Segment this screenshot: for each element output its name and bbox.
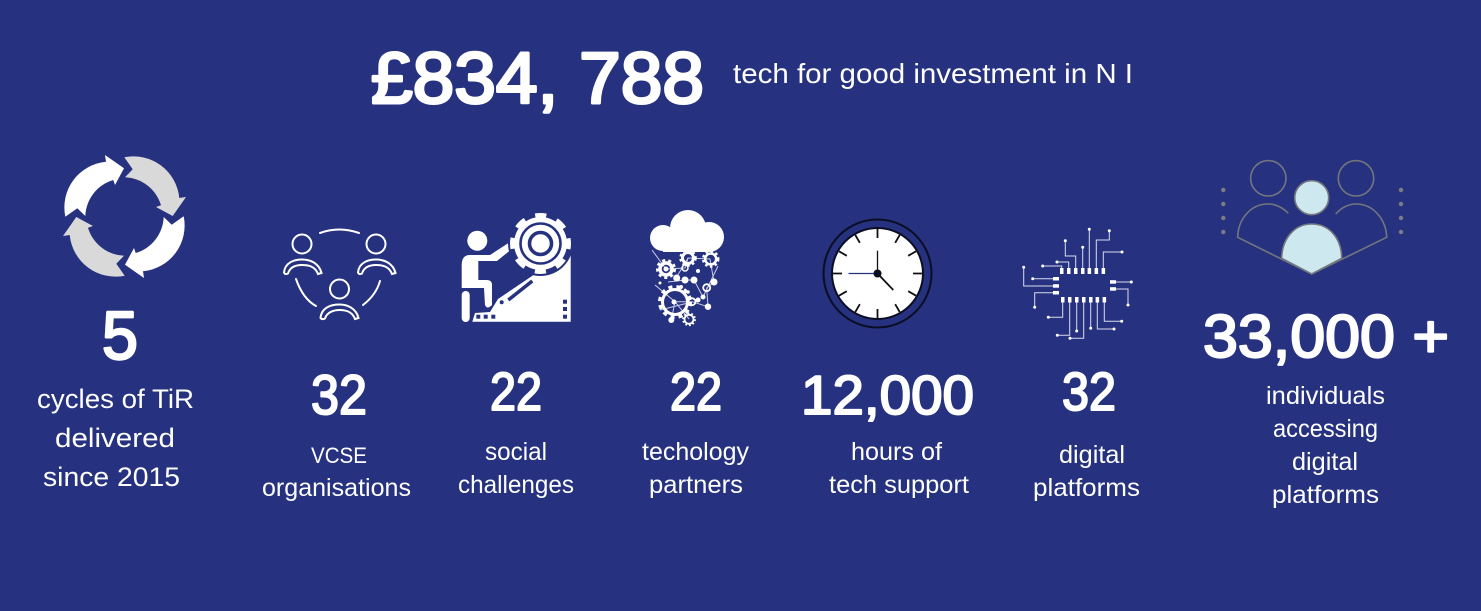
number: 22: 22 [490,362,542,422]
icon: figure pushing gear up slope [462,211,573,322]
panel: hours of tech support [801,220,974,499]
panel: social challenges [458,211,574,499]
number: 32: 32 [1062,362,1116,422]
panel: individuals accessing digital platforms [1203,161,1449,509]
panel: technology partners [642,210,749,499]
label: VCSE organisations [262,443,411,502]
headline caption: tech for good investment in N I [733,58,1133,89]
label: techology partners: partners [649,471,743,499]
number: 33,000 +: 33,000 + [1203,303,1449,370]
label: social challenges: social [485,438,547,466]
icon: group of people [1221,161,1403,274]
label: techology partners: techology [642,438,749,466]
label: social challenges: challenges [458,471,574,499]
label: social challenges [458,438,574,499]
label: individuals accessing digital platforms: digital [1292,448,1358,476]
label: hours of tech support: tech support [829,471,969,499]
icon: circuit chip [1022,228,1133,340]
label: individuals accessing digital platforms [1266,382,1385,509]
label: VCSE organisations: VCSE [311,443,367,468]
icon: circular arrows [63,155,186,278]
label: individuals accessing digital platforms: platforms [1272,481,1379,509]
number: 5: 5 [102,298,138,374]
label: digital platforms: platforms [1033,474,1140,502]
label: VCSE organisations: organisations [262,474,411,502]
headline figure: £834, 788 [371,39,704,119]
icon: three connected people [284,230,396,319]
icon: cloud with gears [650,210,724,325]
panel: digital platforms [1022,228,1140,502]
label: hours of tech support: hours of [851,438,942,466]
label: cycles of TiR delivered since 2015 [37,384,194,492]
panel: VCSE organisations [262,230,411,502]
label: digital platforms [1033,441,1140,502]
label: individuals accessing digital platforms: accessing [1273,415,1378,443]
number: 32: 32 [311,363,367,426]
icon: clock [824,220,932,328]
label: cycles of TiR delivered since 2015: since 2015 [43,462,180,492]
title: investment headline [371,39,1133,119]
number: 12,000: 12,000 [801,364,974,426]
label: digital platforms: digital [1059,441,1125,469]
label: cycles of TiR delivered since 2015: cycles of TiR [37,384,194,414]
panel: cycles of TiR [37,155,194,492]
label: hours of tech support [829,438,969,499]
label: cycles of TiR delivered since 2015: delivered [55,423,175,453]
label: individuals accessing digital platforms: individuals [1266,382,1385,410]
label: techology partners [642,438,749,499]
number: 22: 22 [670,362,722,422]
